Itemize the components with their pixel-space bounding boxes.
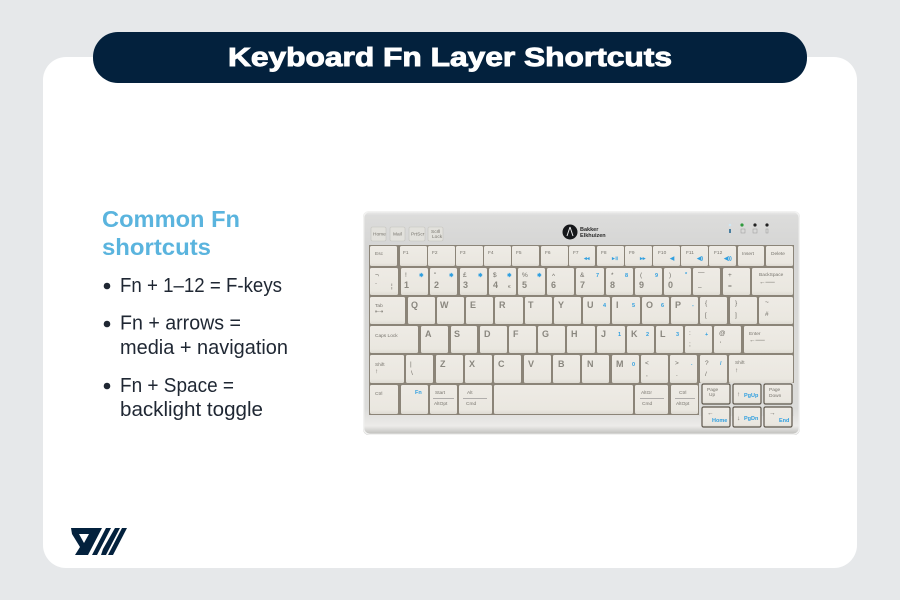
key row: shift row: M [616, 359, 624, 369]
key row: numbers: 4 [493, 280, 498, 290]
top function buttons: PrtScr [411, 232, 425, 238]
key row: home row: H [571, 329, 578, 339]
key row: home row: 3 [676, 332, 679, 338]
key row: QWERTY: 4 [603, 303, 607, 309]
key row: home row: 2 [646, 332, 649, 338]
bullet: backlight toggle: backlight toggle [120, 399, 263, 421]
key row: shift row: < [645, 360, 649, 367]
key row: numbers: ✱ [507, 272, 512, 279]
key row: Esc and function keys [370, 246, 793, 266]
navigation cluster: End [779, 418, 789, 424]
brand logo [562, 224, 606, 240]
key row: home row: G [542, 329, 549, 339]
key row: numbers: ✱ [537, 272, 542, 279]
key row: QWERTY: [ [705, 312, 707, 319]
key row: shift row: . [676, 371, 678, 378]
key row: home row: F [513, 329, 519, 339]
key row: shift row: / [720, 361, 722, 367]
key row: shift row: . [691, 361, 693, 367]
navigation cluster: ↑ [737, 391, 740, 398]
key row: Esc and function keys: F9 [629, 250, 635, 256]
key row: Esc and function keys: F6 [545, 250, 551, 256]
key row: numbers: = [728, 283, 732, 290]
navigation cluster: Page [769, 387, 781, 393]
key row: shift row: ↑ [735, 367, 738, 374]
navigation cluster: Page [707, 387, 719, 393]
top function buttons [371, 227, 443, 241]
navigation cluster: PgDn [744, 416, 759, 422]
key row: QWERTY: Y [558, 300, 564, 310]
key row: home row: : [689, 330, 691, 337]
key row: home row: Caps Lock [375, 333, 398, 339]
key row: numbers: ! [405, 272, 407, 279]
bullet: media and navigation: Fn + arrows = [120, 312, 241, 334]
key row: QWERTY: I [616, 300, 619, 310]
key row: QWERTY: 6 [661, 303, 664, 309]
key row: numbers [370, 268, 793, 295]
key row: Esc and function keys: ◀)) [723, 255, 732, 262]
key row: numbers: ^ [552, 273, 556, 280]
key row: Esc and function keys: ▸॥ [611, 256, 618, 262]
key row: numbers: 0 [668, 280, 673, 290]
key row: home row: ' [720, 341, 721, 348]
brand logo: Bakker [580, 227, 599, 233]
bullet: F-keys: Fn + 1–12 = F-keys [120, 275, 282, 297]
key row: numbers: " [434, 272, 437, 279]
key row: QWERTY: R [499, 300, 506, 310]
title banner [93, 32, 807, 83]
key row: home row: Enter [749, 331, 761, 337]
key row: bottom row with Fn and space: Fn [415, 390, 422, 396]
key row: Esc and function keys: Esc [375, 251, 384, 257]
key row: bottom row with Fn and space: Ctrl [679, 390, 686, 396]
key row: Esc and function keys: F3 [460, 250, 466, 256]
key row: numbers: 6 [551, 280, 556, 290]
key row: home row: @ [719, 330, 726, 337]
key row: bottom row with Fn and space: AltOpt [434, 401, 448, 407]
key row: QWERTY: # [765, 311, 769, 318]
key row: Esc and function keys: ◀ [669, 255, 675, 262]
key row: shift row: \ [411, 370, 413, 377]
key row: home row: J [601, 329, 606, 339]
key row: shift row: ↑ [375, 368, 378, 375]
key row: QWERTY: - [692, 303, 694, 309]
key row: Esc and function keys: ◂◂ [583, 256, 591, 262]
key row: shift row: Z [440, 359, 446, 369]
key row: Esc and function keys: F1 [403, 250, 409, 256]
key row: home row: ←── [749, 337, 765, 344]
key row: shift row: X [469, 359, 475, 369]
key row: bottom row with Fn and space [370, 385, 698, 414]
key row: numbers: ) [669, 272, 671, 279]
key row: numbers: 8 [610, 280, 615, 290]
key row: QWERTY: ] [735, 312, 737, 319]
key row: Esc and function keys: F2 [432, 250, 438, 256]
key row: QWERTY: Q [411, 300, 418, 310]
key row: QWERTY: E [470, 300, 476, 310]
navigation cluster: ← [707, 410, 714, 417]
key row: Esc and function keys: F7 [573, 250, 579, 256]
key row: shift row: / [705, 371, 707, 378]
key row: numbers: * [611, 272, 614, 279]
key row: bottom row with Fn and space: Ctrl [375, 391, 382, 397]
key row: numbers: ✱ [449, 272, 454, 279]
status LEDs [729, 223, 769, 233]
bullet: media and navigation: media + navigation [120, 337, 288, 359]
key row: shift row [370, 355, 793, 383]
key row: QWERTY: W [440, 300, 449, 310]
heading: common Fn shortcuts: shortcuts [102, 234, 211, 260]
key row: QWERTY [370, 297, 793, 324]
keyboard body [363, 211, 800, 435]
key row: shift row: 0 [632, 362, 635, 368]
key row: Esc and function keys: F5 [516, 250, 522, 256]
key row: Esc and function keys: F12 [714, 250, 723, 256]
key row: shift row: | [410, 361, 412, 368]
key row: home row: L [660, 329, 666, 339]
key row: numbers: % [522, 272, 528, 279]
key row: home row: D [484, 329, 491, 339]
key row: home row [370, 326, 793, 353]
navigation cluster: ↓ [737, 415, 740, 422]
key row: numbers: BackSpace [759, 272, 784, 278]
key row: home row: A [425, 329, 432, 339]
brand logo: Elkhuizen [580, 233, 606, 239]
title: Keyboard Fn Layer Shortcuts [228, 44, 672, 72]
key row: bottom row with Fn and space: Start [435, 390, 446, 396]
heading: common Fn shortcuts: Common Fn [102, 206, 240, 232]
key row: numbers: ¦ [391, 283, 393, 290]
navigation cluster: Down [769, 393, 782, 399]
top function buttons: Scrll [431, 229, 440, 235]
key row: numbers: – [698, 284, 702, 291]
navigation cluster: Up [709, 392, 715, 398]
key row: QWERTY: T [528, 300, 534, 310]
key row: Esc and function keys: F11 [686, 250, 694, 256]
navigation cluster: Home [712, 418, 727, 424]
key row: Esc and function keys: Delete [771, 251, 785, 257]
key row: numbers: 1 [404, 280, 409, 290]
heading: common Fn shortcuts [102, 206, 240, 260]
key row: QWERTY: ~ [765, 299, 769, 306]
bullet: media and navigation [104, 312, 288, 359]
key row: numbers: $ [493, 272, 497, 279]
key row: numbers: 7 [596, 273, 599, 279]
key row: QWERTY: ⇤⇥ [375, 310, 383, 315]
bullet: backlight toggle: Fn + Space = [120, 375, 234, 397]
key row: numbers: 2 [434, 280, 439, 290]
key row: numbers: ¬ [375, 272, 379, 279]
key row: bottom row with Fn and space: Alt [467, 390, 473, 396]
key row: numbers: ←── [759, 279, 775, 286]
key row: shift row: Shift [735, 360, 745, 366]
key row: shift row: C [498, 359, 505, 369]
brand logo mark [71, 528, 127, 555]
key row: shift row: ? [705, 360, 709, 367]
key row: Esc and function keys: F4 [488, 250, 494, 256]
key row: QWERTY: U [587, 300, 594, 310]
key row: bottom row with Fn and space: Cmd [642, 401, 652, 407]
top function buttons: Mail [393, 232, 402, 238]
key row: home row: S [454, 329, 460, 339]
key row: QWERTY: P [675, 300, 681, 310]
key row: QWERTY: Tab [375, 303, 383, 309]
key row: numbers: ✱ [478, 272, 483, 279]
key row: shift row: V [528, 359, 534, 369]
top function buttons: Lock [432, 234, 443, 240]
key row: QWERTY: 5 [632, 303, 635, 309]
shortcut list [104, 275, 288, 421]
key row: numbers: € [508, 284, 511, 290]
key row: Esc and function keys: F8 [601, 250, 607, 256]
key row: numbers: & [580, 272, 585, 279]
key row: numbers: ✱ [419, 272, 424, 279]
key row: home row: + [705, 332, 708, 338]
key row: shift row: B [558, 359, 565, 369]
bullet: backlight toggle [104, 375, 263, 421]
key row: home row: ; [689, 341, 691, 348]
key row: numbers: 9 [639, 280, 644, 290]
key row: shift row: Shift [375, 362, 385, 368]
panel: white card [43, 57, 857, 568]
key row: Esc and function keys: ◀) [696, 255, 703, 262]
key row: numbers: 9 [655, 273, 658, 279]
key row: numbers: £ [463, 272, 467, 279]
key row: home row: 1 [618, 332, 621, 338]
key row: QWERTY: { [705, 300, 708, 307]
key row: shift row: , [646, 371, 648, 378]
key row: shift row: > [675, 360, 679, 367]
key row: numbers: 8 [625, 273, 628, 279]
key row: shift row: N [587, 359, 594, 369]
key row: numbers: ` [375, 283, 377, 290]
key row: Esc and function keys: Insert [742, 251, 755, 257]
key row: bottom row with Fn and space: AltOpt [676, 401, 690, 407]
keyboard photo [363, 211, 800, 435]
key row: bottom row with Fn and space: Cmd [466, 401, 476, 407]
key row: numbers: 3 [463, 280, 468, 290]
key row: numbers: 7 [580, 280, 585, 290]
top function buttons: Home [373, 232, 386, 238]
key row: numbers: ( [640, 272, 643, 279]
key row: numbers: 5 [522, 280, 527, 290]
key row: numbers: + [728, 272, 732, 279]
navigation cluster: PgUp [744, 393, 759, 399]
key row: Esc and function keys: ▸▸ [639, 256, 647, 262]
navigation cluster: → [769, 410, 776, 417]
navigation cluster [702, 384, 792, 427]
key row: QWERTY: } [735, 300, 738, 307]
key row: home row: K [631, 329, 638, 339]
key row: bottom row with Fn and space: AltGr [641, 390, 652, 396]
key row: numbers: — [698, 269, 705, 276]
key row: numbers: * [685, 272, 688, 278]
key row: QWERTY: O [646, 300, 653, 310]
key row: Esc and function keys: F10 [658, 250, 667, 256]
